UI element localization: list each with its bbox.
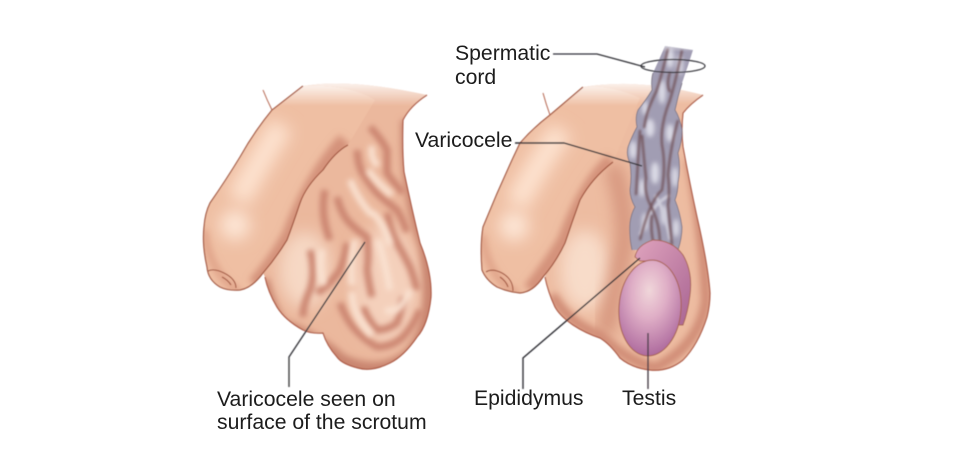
label: testis: Testis: [622, 387, 676, 410]
penis shaft, side view: [202, 85, 349, 292]
panel: right illustration, internal view: [481, 40, 710, 389]
scrotum cutaway: [545, 78, 710, 370]
label: varicocele: Varicocele: [415, 129, 512, 152]
label: spermatic cord: Spermatic: [455, 42, 550, 65]
label: epididymus: Epididymus: [474, 387, 584, 410]
encircling ring marker around cord: [641, 60, 705, 72]
epididymis: [635, 240, 691, 325]
leader line: epididymis: [523, 258, 640, 389]
testis: [616, 258, 684, 358]
penis shaft, side view: [481, 80, 650, 294]
spermatic cord with dilated veins: [627, 40, 700, 250]
leader line: testis: [647, 333, 649, 389]
label: varicocele seen on surface: surface of the scrotum: [217, 411, 427, 434]
label: varicocele seen on surface: Varicocele seen on: [217, 388, 396, 411]
scrotum with visible surface veins: [262, 78, 435, 369]
panel: left illustration, surface view: [203, 78, 435, 387]
leader line: varicocele: [515, 143, 642, 166]
infographic: varicocele anatomy diagram: [202, 44, 712, 429]
label: spermatic cord: cord: [455, 66, 496, 89]
leader line: surface varicocele: [289, 242, 365, 387]
leader line: spermatic cord: [553, 54, 645, 67]
